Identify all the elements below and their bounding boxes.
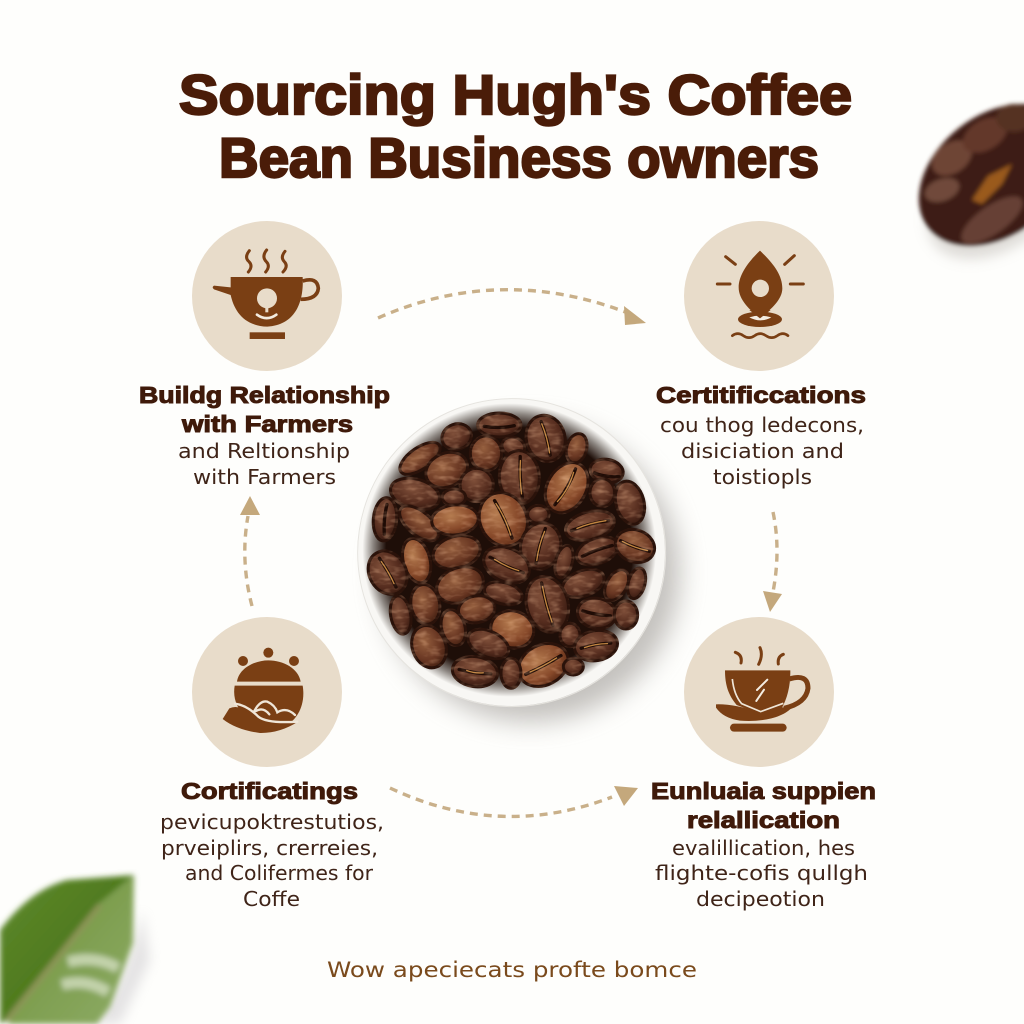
arrow: top, left to right bbox=[378, 290, 646, 325]
title: Bean Business owners bbox=[219, 126, 819, 189]
arrow: right, downward bbox=[763, 512, 782, 612]
step text: build relationship: with Farmers bbox=[181, 411, 353, 437]
step text: supplier evaluation: flighte-cofis qullgh bbox=[655, 861, 868, 885]
step text: build relationship: with Farmers bbox=[193, 465, 336, 489]
bowl shadow bbox=[380, 422, 680, 722]
step text: cortificatings: Coffe bbox=[243, 887, 300, 911]
step text: supplier evaluation: relallication bbox=[687, 807, 840, 833]
title bbox=[179, 63, 852, 189]
icon circle: hand holding beans bbox=[192, 617, 342, 767]
title: Sourcing Hugh's Coffee bbox=[179, 63, 852, 126]
icon circle: cup with face bbox=[192, 221, 342, 371]
step text: build relationship bbox=[139, 382, 390, 489]
footer text: Wow apeciecats profte bomce bbox=[327, 958, 697, 982]
step text: supplier evaluation bbox=[651, 778, 876, 911]
icon circle: location drop bbox=[684, 221, 834, 371]
step text: certifications: cou thog ledecons, bbox=[660, 413, 864, 437]
icon circle: cup on saucer bbox=[684, 617, 834, 767]
step text: certifications: disiciation and bbox=[681, 439, 844, 463]
step text: cortificatings: pevicupoktrestutios, bbox=[160, 810, 384, 834]
step text: supplier evaluation: evalillication, hes bbox=[672, 836, 855, 860]
step text: cortificatings: Cortificatings bbox=[181, 778, 358, 804]
decorative coffee bean top right bbox=[891, 75, 1024, 285]
central bowl of coffee beans bbox=[358, 399, 680, 722]
bowl bbox=[358, 399, 666, 707]
step text: build relationship: and Reltionship bbox=[178, 439, 350, 463]
decorative leaf bottom left bbox=[0, 875, 150, 1024]
step text: certifications bbox=[656, 382, 866, 489]
step text: build relationship: Buildg Relationship bbox=[139, 382, 390, 408]
step text: supplier evaluation: decipeotion bbox=[696, 887, 825, 911]
arrow: left, upward bbox=[240, 496, 260, 606]
step text: supplier evaluation: Eunluaia suppien bbox=[651, 778, 876, 804]
step text: cortificatings: prveiplirs, crerreies, bbox=[161, 836, 378, 860]
step text: cortificatings bbox=[160, 778, 384, 911]
coffee beans bbox=[360, 411, 659, 695]
step text: certifications: Certitificcations bbox=[656, 382, 866, 408]
arrow: bottom, left to right bbox=[390, 786, 638, 816]
step text: certifications: toistiopls bbox=[713, 465, 812, 489]
step text: cortificatings: and Colifermes for bbox=[185, 861, 374, 885]
